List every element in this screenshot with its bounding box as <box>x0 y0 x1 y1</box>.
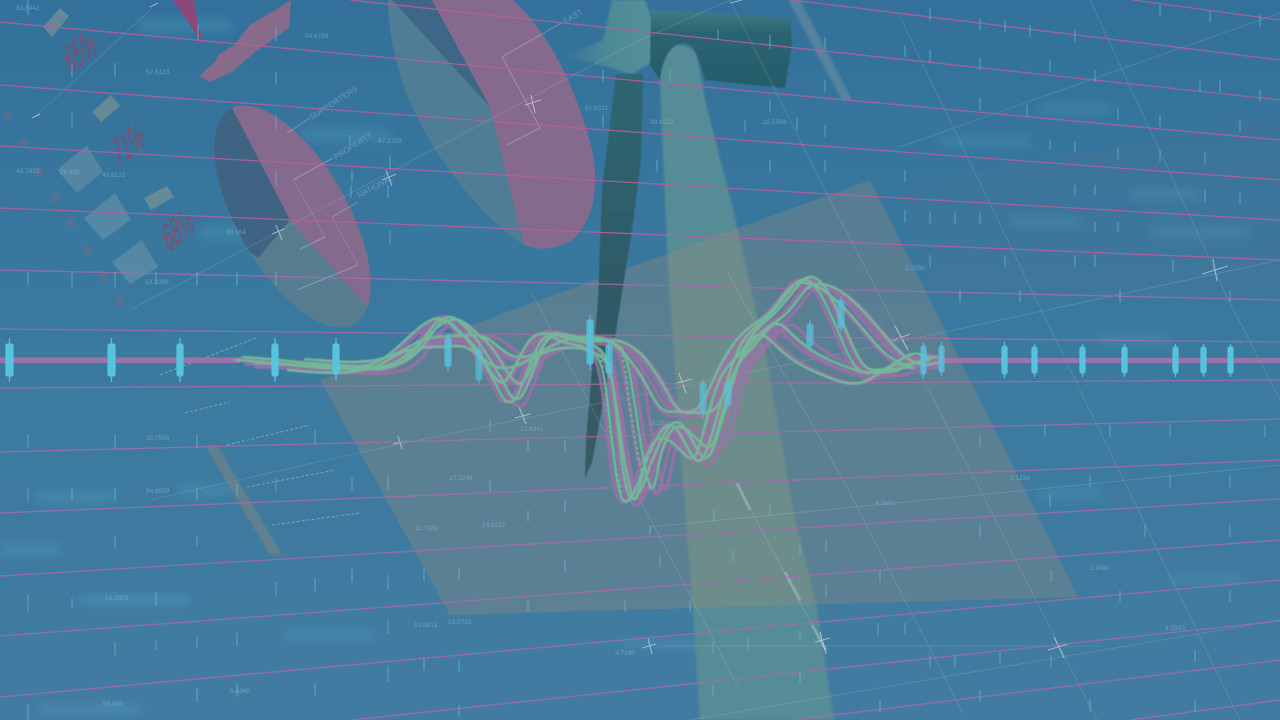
small data numbers: 32.7599 <box>146 435 170 442</box>
small data numbers: 3.2280 <box>905 265 925 272</box>
percent labels: 71% <box>108 113 148 177</box>
small data numbers: 14.8813 <box>414 622 438 629</box>
small data numbers: 28.892 <box>60 169 80 176</box>
small data numbers: 12.8341 <box>520 426 544 433</box>
purple traces <box>232 278 943 506</box>
tower dashes <box>735 480 827 653</box>
small data numbers: 83.8442 <box>16 5 40 12</box>
center baseline band <box>0 358 240 363</box>
percent labels: 65% <box>60 20 100 84</box>
legend tiles <box>43 8 174 210</box>
dashed lines <box>160 338 360 525</box>
baseline band right <box>905 358 1280 363</box>
pie chart: small <box>214 106 371 328</box>
light squares <box>57 145 158 284</box>
small data numbers: 61.8321 <box>585 105 609 112</box>
pie chart labels: EAST <box>562 7 584 26</box>
small data numbers: 4.3310 <box>1165 625 1185 632</box>
small data numbers: 57.5123 <box>146 69 170 76</box>
small data numbers: 54.6789 <box>305 33 329 40</box>
pie chart labels: PROPERTY <box>332 130 374 162</box>
dim markers <box>2 111 124 307</box>
small data numbers: 43.7812 <box>16 168 40 175</box>
small data numbers: 4.5821 <box>875 500 895 507</box>
small data numbers: 87.1789 <box>378 138 402 145</box>
candlestick markers <box>6 296 1233 418</box>
small data numbers: 14.6327 <box>482 522 506 529</box>
small data numbers: 30.164 <box>226 229 246 236</box>
nacelle <box>650 10 792 88</box>
small data numbers: 52.1098 <box>145 279 169 286</box>
small data numbers: 59.893 <box>103 701 123 708</box>
small data numbers: 6.4345 <box>230 688 250 695</box>
pie chart labels: NATIONAL <box>356 173 395 200</box>
map fragment <box>173 0 291 82</box>
vertical blade <box>585 74 643 478</box>
percent labels <box>60 20 198 262</box>
wind turbine upper parts <box>565 0 827 653</box>
small data numbers: 40.6121 <box>102 172 126 179</box>
diagonal streak top right <box>788 0 852 100</box>
small data numbers: 18.2911 <box>648 420 671 427</box>
dotted descent traces <box>600 350 652 495</box>
small data numbers: 16.2853 <box>105 595 129 602</box>
pie chart: large <box>385 0 600 255</box>
waveform ribbon <box>232 277 943 506</box>
small data numbers: 84.8559 <box>146 488 170 495</box>
pie chart labels: SUPPORTERS <box>308 84 359 122</box>
hub and horizontal blade <box>565 0 652 74</box>
small data numbers: 4.7190 <box>615 650 635 657</box>
small data numbers: 39.8212 <box>650 119 674 126</box>
small data numbers: 1.9080 <box>1090 565 1110 572</box>
small data numbers: 53.5723 <box>448 619 472 626</box>
green traces <box>236 277 937 502</box>
faint upper right plane <box>900 115 1280 300</box>
small data numbers: 17.1234 <box>449 475 473 482</box>
pie chart leader lines <box>287 22 563 290</box>
small data numbers: 11.7189 <box>415 525 438 532</box>
small data numbers: 22.5566 <box>763 119 787 126</box>
diagonal streak lower left <box>205 445 282 555</box>
small data numbers: 1.1234 <box>1010 475 1030 482</box>
panel: translucent perspective plane <box>320 180 1078 615</box>
percent labels: 68% <box>158 198 198 262</box>
tower <box>659 45 834 720</box>
pie chart labels <box>308 7 584 200</box>
